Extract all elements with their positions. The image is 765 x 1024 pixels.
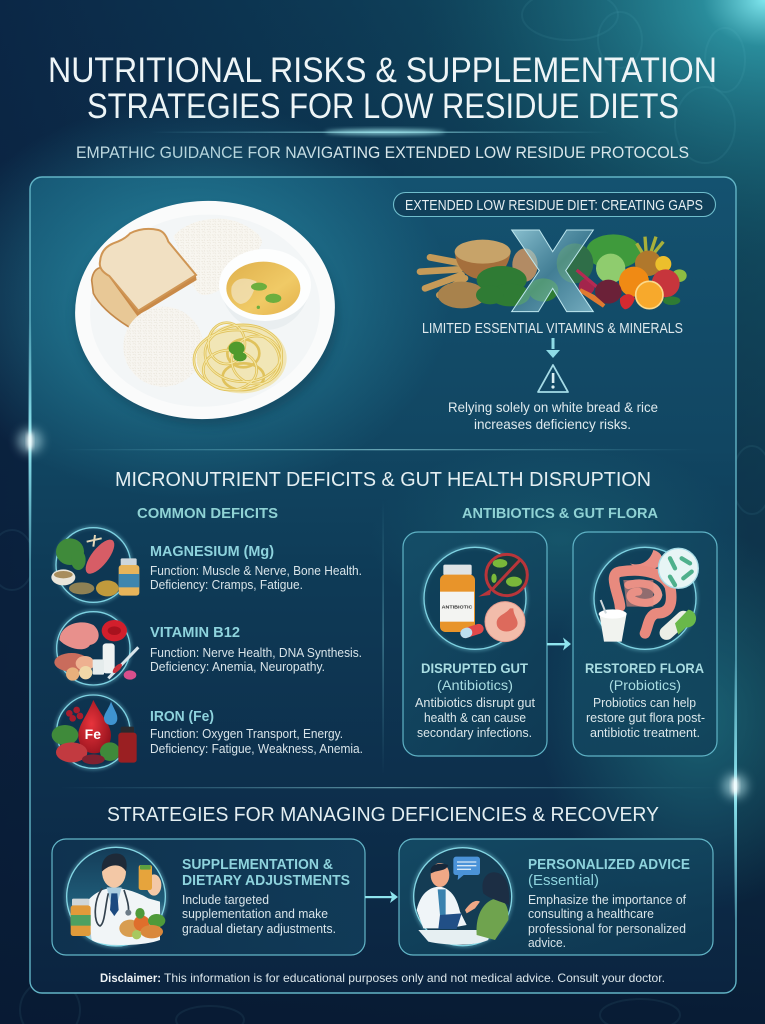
card: personalized advice (399, 839, 713, 955)
details: iron: Function: Oxygen Transport, Energy. (150, 727, 343, 741)
title (48, 51, 717, 126)
text: personalized advice: Emphasize the importance of (528, 893, 687, 907)
title: restored flora (585, 660, 704, 693)
heading: micronutrient deficits: MICRONUTRIENT DEFICITS & GUT HEALTH DISRUPTION (115, 469, 651, 491)
text: supplementation: gradual dietary adjustments. (182, 922, 336, 936)
deficit: vitamin b12 (54, 611, 362, 685)
text: disrupted gut (415, 695, 535, 740)
arrow: supplementation to advice (365, 891, 398, 903)
icon: intestine and probiotics (594, 547, 698, 650)
deficit: iron (52, 695, 363, 769)
title: supplementation: SUPPLEMENTATION & (182, 857, 333, 873)
icon: doctor with supplements (66, 847, 166, 946)
details: magnesium (150, 564, 362, 592)
icon: magnesium foods (51, 527, 139, 603)
details: magnesium: Deficiency: Cramps, Fatigue. (150, 578, 303, 592)
name: magnesium: MAGNESIUM (Mg) (150, 544, 274, 560)
title: supplementation: DIETARY ADJUSTMENTS (182, 873, 350, 889)
name: iron: IRON (Fe) (150, 709, 214, 725)
text: disrupted gut: Antibiotics disrupt gut (415, 695, 535, 710)
title divider (150, 129, 610, 135)
title: STRATEGIES FOR LOW RESIDUE DIETS (87, 87, 679, 126)
card: disrupted gut (403, 532, 547, 756)
details: vitamin b12: Deficiency: Anemia, Neuropathy. (150, 660, 325, 674)
arrow: disrupted to restored (547, 638, 571, 650)
icon: doctor consultation (413, 847, 512, 946)
text: supplementation: supplementation and make (182, 907, 328, 921)
label: limited vitamins: LIMITED ESSENTIAL VITAMINS & MINERALS (422, 321, 683, 337)
title: disrupted gut (421, 660, 528, 693)
title: personalized advice: PERSONALIZED ADVICE (528, 857, 690, 873)
divider (60, 449, 700, 450)
disclaimer: This information is for educational purposes only and not medical advice. Consult your doctor. (164, 971, 665, 985)
text: deficiency warning: Relying solely on white bread & rice (448, 399, 658, 415)
disclaimer: Disclaimer: (100, 971, 161, 985)
details: magnesium: Function: Muscle & Nerve, Bone Health. (150, 564, 362, 578)
details: vitamin b12: Function: Nerve Health, DNA Synthesis. (150, 646, 362, 660)
title: disrupted gut: (Antibiotics) (437, 677, 513, 693)
divider (60, 787, 720, 788)
text: personalized advice (528, 893, 687, 950)
name: vitamin b12: VITAMIN B12 (150, 625, 240, 641)
icon: iron foods: Fe (85, 726, 101, 742)
title: personalized advice (528, 857, 690, 889)
icon: iron foods (52, 695, 137, 769)
details: vitamin b12 (150, 646, 362, 674)
icon: antibiotic bottle and stomach: ANTIBIOTIC (442, 604, 473, 610)
vertical divider (382, 500, 384, 775)
title: NUTRITIONAL RISKS & SUPPLEMENTATION (48, 51, 717, 90)
icon: antibiotic bottle and stomach (424, 547, 527, 650)
text: restored flora: restore gut flora post- (586, 710, 705, 725)
illustration: low residue plate (68, 192, 342, 428)
subheading: antibiotics and gut flora: ANTIBIOTICS & GUT FLORA (462, 506, 659, 522)
text: personalized advice: advice. (528, 936, 566, 950)
text: personalized advice: professional for personalized (528, 922, 686, 936)
text: disrupted gut: health & can cause (424, 710, 526, 725)
heading: strategies: STRATEGIES FOR MANAGING DEFICIENCIES & RECOVERY (107, 804, 659, 826)
text: supplementation (182, 893, 336, 936)
title: disrupted gut: DISRUPTED GUT (421, 660, 528, 676)
title: restored flora: RESTORED FLORA (585, 660, 704, 676)
icon: warning (538, 365, 568, 392)
text: disrupted gut: secondary infections. (417, 725, 532, 740)
title: supplementation (182, 857, 350, 889)
subtitle: EMPATHIC GUIDANCE FOR NAVIGATING EXTENDED LOW RESIDUE PROTOCOLS (76, 144, 689, 162)
text: restored flora: Probiotics can help (593, 695, 696, 710)
card: restored flora (573, 532, 717, 756)
text: restored flora: antibiotic treatment. (590, 725, 700, 740)
title: restored flora: (Probiotics) (609, 677, 681, 693)
text: supplementation: Include targeted (182, 893, 269, 907)
details: iron (150, 727, 363, 756)
text: restored flora (586, 695, 705, 740)
text: deficiency warning: increases deficiency risks. (474, 416, 631, 432)
text: deficiency warning (448, 399, 658, 432)
subheading: common deficits: COMMON DEFICITS (137, 506, 278, 522)
details: iron: Deficiency: Fatigue, Weakness, Anemia. (150, 742, 363, 756)
arrow: down (546, 338, 560, 358)
illustration: nutrient foods crossed out (420, 230, 687, 312)
pill heading: extended low residue diet (394, 192, 716, 216)
text: personalized advice: consulting a healthcare (528, 907, 654, 921)
title: personalized advice: (Essential) (528, 873, 599, 889)
deficit: magnesium (51, 527, 362, 603)
card: supplementation (52, 839, 365, 955)
pill heading: extended low residue diet: EXTENDED LOW RESIDUE DIET: CREATING GAPS (405, 198, 703, 214)
icon: vitamin b12 foods (54, 611, 138, 685)
